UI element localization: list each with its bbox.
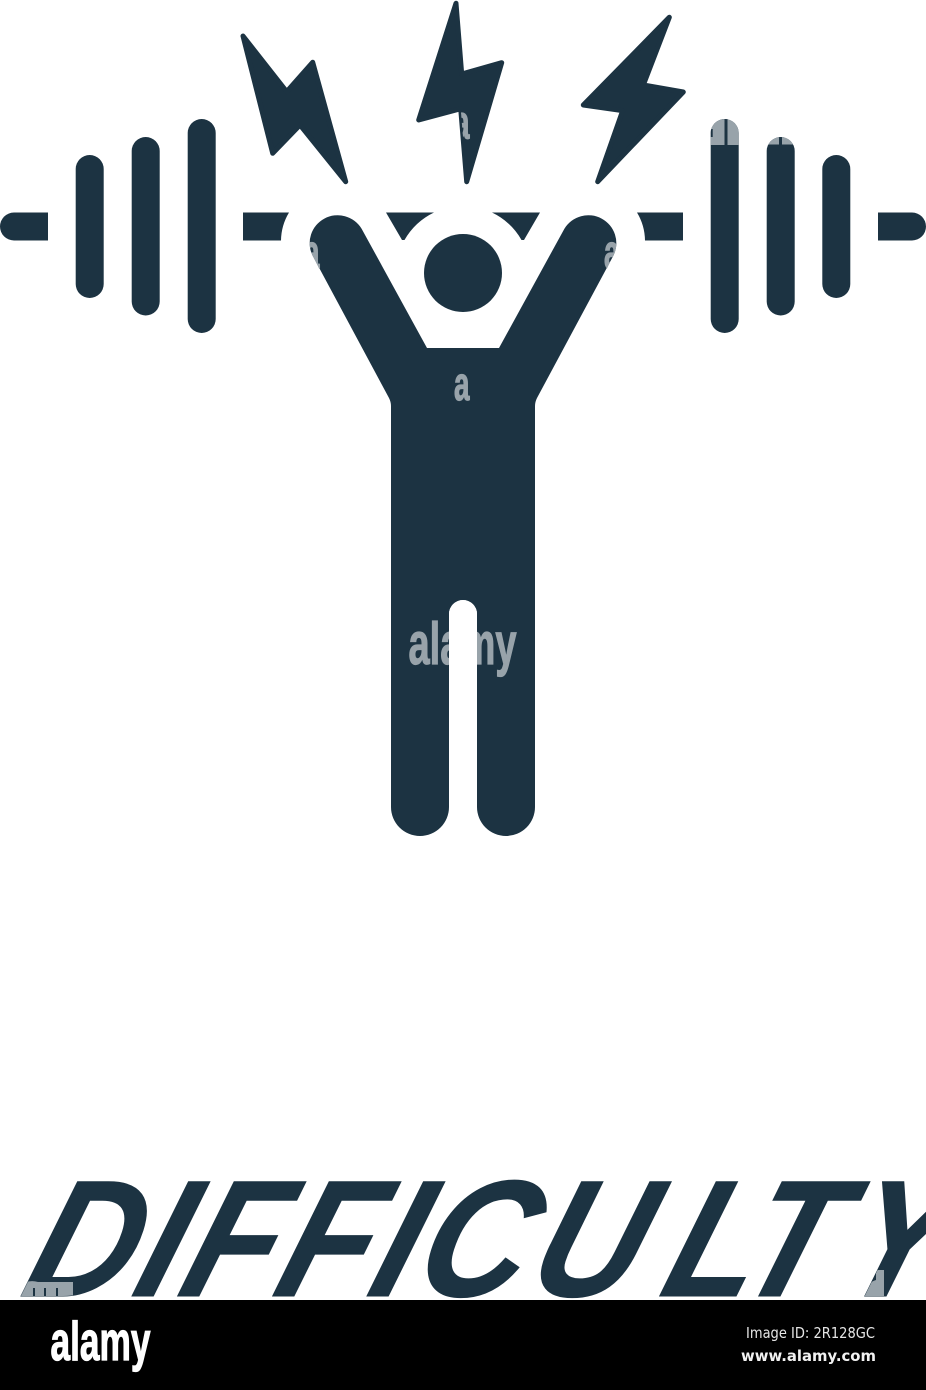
- icon: lightning bolt left: [243, 36, 346, 182]
- image id: Image ID: 2R128GC: [746, 1324, 875, 1342]
- leg gap: [449, 600, 477, 700]
- icon: barbell: [0, 119, 926, 333]
- icon: figure body with raised arms: [310, 215, 616, 836]
- icon: figure head: [424, 234, 502, 312]
- watermark: fragments on title: [20, 1270, 884, 1297]
- watermark: tops of right weights: [710, 119, 795, 145]
- footer logo: alamy: [50, 1310, 151, 1372]
- watermark: letter on right hand: a: [604, 225, 620, 278]
- icon: lightning bolt centre: [419, 3, 502, 182]
- icon: lightning bolt right: [583, 17, 683, 182]
- watermark: letter on centre bolt: a: [454, 96, 470, 148]
- watermark: alamy on legs: alamy: [408, 611, 517, 677]
- website url: www.alamy.com: [741, 1347, 876, 1365]
- watermark: letter on left hand: a: [304, 225, 320, 278]
- watermark: letter on torso: a: [454, 357, 470, 410]
- footer bar: [0, 1300, 926, 1390]
